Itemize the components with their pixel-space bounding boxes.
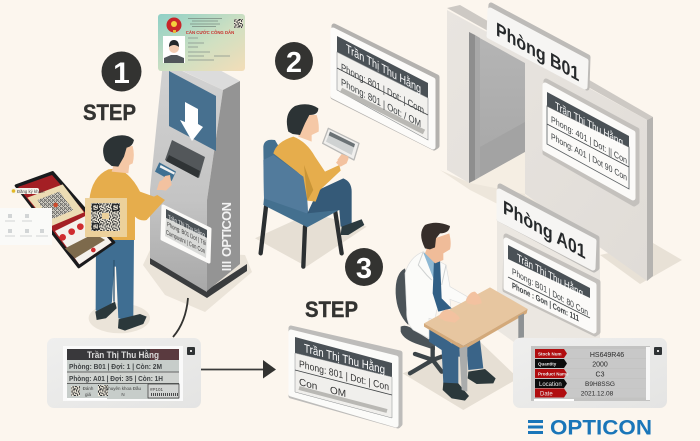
panel: e-ink sign on wall B01: Phong: A01 | Dot 90 Con	[551, 132, 627, 184]
sign: e-ink wall display step 2: Trần Thị Thu Hằng	[346, 41, 421, 96]
room wall with door	[440, 5, 682, 348]
panel: e-ink tag patient	[47, 338, 201, 408]
panel: e-ink sign step 3: Trần Thị Thu Hằng	[304, 340, 385, 377]
row Product Name: Product Name	[538, 372, 569, 376]
badge: step 1	[102, 52, 142, 92]
person using kiosk	[89, 135, 176, 333]
app menu overlay	[0, 208, 52, 245]
badge: step 3: 3	[356, 253, 372, 285]
person seated on chair	[255, 104, 367, 267]
row Product Name: C3	[596, 372, 605, 378]
kiosk e-ink sign: Phong: B01 Dot | Tôi	[167, 221, 206, 248]
chair	[396, 268, 442, 373]
sign: Phòng B01: Phòng B01	[496, 18, 579, 86]
row Quantity: 2000	[592, 362, 608, 368]
arrow	[201, 360, 276, 378]
row Location: Location	[539, 382, 562, 388]
phone with QR app	[16, 172, 114, 267]
kiosk logo: OPTICON	[219, 202, 234, 257]
row Date	[534, 388, 646, 398]
badge: step 2	[275, 42, 313, 80]
panel: e-ink sign on wall B01: Phong: 401 | Dot: || Con	[551, 115, 627, 167]
panel: e-ink tag patient: Chuyên khoa Đầu	[105, 386, 142, 391]
row Location: B9H8SSG	[585, 381, 615, 388]
row Stock Num: HS649R46	[590, 352, 624, 359]
kiosk screen	[169, 71, 216, 151]
row Quantity	[534, 359, 646, 368]
kiosk e-ink sign: Compostni | Con Con	[166, 229, 205, 255]
badge: step 3	[345, 248, 383, 286]
kiosk with screen and slot	[150, 52, 247, 298]
connector curve	[173, 298, 188, 337]
row Stock Num	[534, 349, 646, 359]
sign: e-ink wall display step 2: Phong: 801 | Oot: / OM	[341, 77, 421, 130]
panel: e-ink tag patient: giá	[85, 392, 91, 397]
panel: e-ink sign on wall A01: Phong: B01 | Dot: 80 Con	[512, 267, 588, 319]
ID card	[158, 14, 245, 71]
row Date: Date	[540, 392, 553, 398]
row Product Name	[534, 369, 646, 378]
ID card: CĂN CƯỚC CÔNG DÂN	[186, 30, 234, 35]
doctor at desk	[396, 223, 528, 410]
panel: e-ink tag patient: N	[121, 392, 125, 397]
panel: e-ink sign step 3	[291, 328, 400, 426]
panel: e-ink sign step 3: Con	[299, 377, 317, 393]
badge: step 2: 2	[286, 47, 302, 79]
panel: e-ink sign step 3: OM	[330, 385, 346, 400]
kiosk e-ink sign	[162, 206, 210, 262]
sign: e-ink wall display step 2: Phong: 801 | Dot: | Com	[341, 62, 424, 117]
badge: step 1: 1	[113, 57, 130, 90]
panel: e-ink tag patient: Đánh	[83, 386, 94, 391]
panel: e-ink tag stock	[513, 338, 667, 408]
row Date: 2021.12.08	[581, 390, 614, 398]
card slot	[165, 140, 205, 178]
row Location	[534, 379, 646, 388]
heading: STEP 1: STEP	[83, 100, 136, 125]
panel: e-ink sign step 3: Phong: 801 | Dot: | Con	[299, 359, 389, 393]
panel: e-ink tag patient: Trần Thị Thu Hằng	[87, 349, 159, 360]
row Stock Num: Stock Num	[538, 352, 562, 356]
kiosk e-ink sign: Trần Thị Thu Hằng	[168, 212, 205, 239]
sign: Phòng A01	[499, 186, 597, 270]
panel: e-ink sign on wall A01: Phone : Gon | Com: 111	[512, 280, 579, 323]
panel: e-ink sign on wall B01: Trần Thị Thu Hằng	[555, 99, 623, 149]
logo: OPTICON: OPTICON	[550, 416, 652, 440]
panel: e-ink sign on wall B01	[545, 81, 637, 204]
app label	[11, 188, 45, 194]
sign: e-ink wall display step 2	[333, 26, 437, 148]
heading: STEP 3: STEP	[305, 297, 358, 322]
panel: e-ink tag patient: #P101	[150, 387, 164, 392]
app label: Đăng ký khám	[17, 189, 45, 194]
row Quantity: Quantity	[538, 362, 557, 366]
sign: kiosk floor shadow	[143, 250, 252, 312]
panel: e-ink sign on wall A01	[505, 236, 598, 334]
sign: Phòng B01	[489, 5, 588, 88]
sign: Phòng A01: Phòng A01	[503, 196, 586, 263]
QR card	[85, 198, 127, 237]
panel: e-ink sign on wall A01: Trần Thị Thu Hằng	[517, 251, 583, 300]
panel: e-ink tag patient: Phòng: A01 | Đợi: 35 | Còn: 1H	[69, 374, 163, 383]
panel: e-ink tag patient: Phòng: B01 | Đợi: 1 | Còn: 2M	[69, 362, 162, 371]
